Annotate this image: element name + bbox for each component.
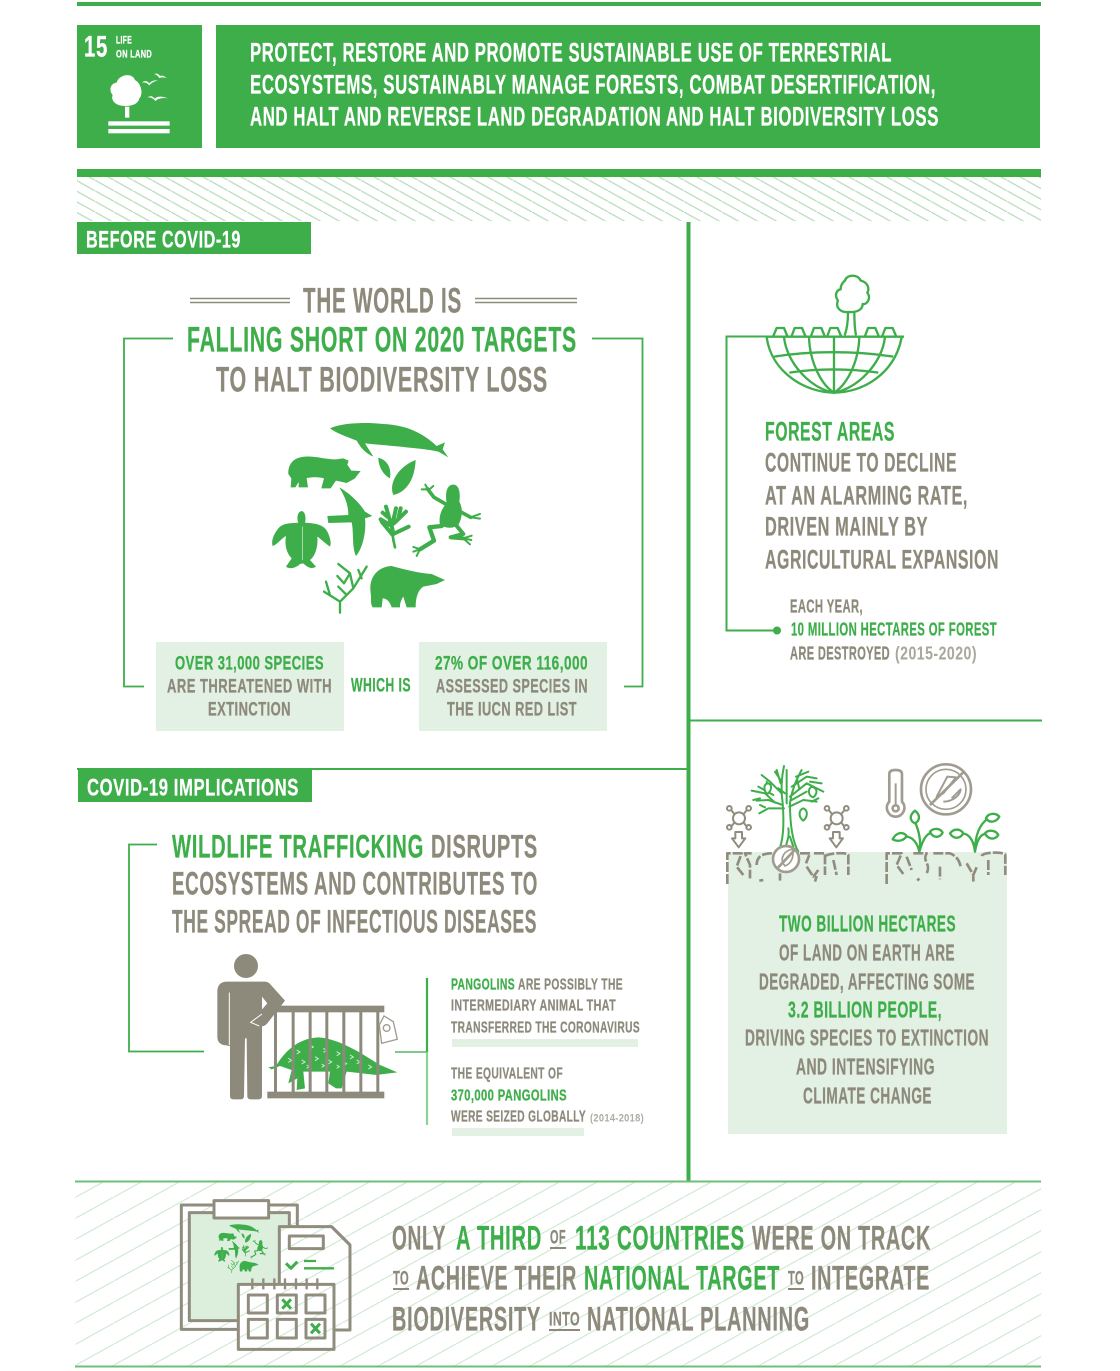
text: pangolin facts: ARE POSSIBLY THE [518, 976, 623, 993]
panel: land degradation [727, 764, 1007, 1134]
icon: seedlings [893, 811, 999, 852]
text: forest decline [765, 416, 999, 574]
text: only a third of countries: WERE ON TRACK [752, 1219, 931, 1257]
icon: thermometer [887, 770, 904, 817]
text: only a third of countries: INTEGRATE [811, 1259, 930, 1297]
heading: wildlife trafficking [172, 828, 538, 939]
icon: species on clipboard [214, 1224, 268, 1273]
text: forest decline: FOREST AREAS [765, 416, 895, 446]
label: covid-19 implications: COVID-19 IMPLICATIONS [87, 774, 299, 801]
text: pangolin facts: THE EQUIVALENT OF [451, 1065, 563, 1082]
SDG 15 badge: LIFE [116, 34, 132, 46]
callout: 27 percent: 27% OF OVER 116,000 [435, 653, 588, 674]
icon: price tag [379, 1016, 397, 1043]
icon: checklist document [279, 1227, 350, 1330]
text: only a third of countries: NATIONAL TARGET [584, 1259, 780, 1297]
text: pangolin facts: PANGOLINS [451, 976, 515, 993]
SDG 15 badge: ON LAND [116, 48, 152, 60]
heading: wildlife trafficking: WILDLIFE TRAFFICKING [172, 828, 424, 864]
icon: no sun sign [921, 764, 971, 814]
text: only a third of countries: INTO [549, 1309, 580, 1330]
icon: calendar [238, 1278, 334, 1349]
callout: 31,000 species: ARE THREATENED WITH [167, 676, 332, 697]
bracket [129, 844, 204, 1052]
text: only a third of countries: TO [393, 1268, 409, 1289]
text: pangolin facts [451, 976, 644, 1136]
text: two billion hectares: TWO BILLION HECTARES [779, 910, 956, 936]
heading: falling short on targets [187, 281, 577, 399]
icon: no leaf sign on roots [773, 846, 799, 872]
heading: wildlife trafficking: DISRUPTS [431, 828, 538, 864]
heading: wildlife trafficking: THE SPREAD OF INFECTIOUS DISEASES [172, 903, 537, 939]
icon: turtle [272, 511, 331, 568]
text: only a third of countries: OF [550, 1227, 566, 1248]
text: two billion hectares: CLIMATE CHANGE [803, 1082, 932, 1108]
label: before covid-19: BEFORE COVID-19 [86, 226, 241, 253]
icon: rhino [288, 457, 361, 488]
icon: person with caged pangolin [217, 954, 397, 1099]
callout: 27 percent: THE IUCN RED LIST [447, 699, 577, 720]
icon: clipboard [181, 1201, 297, 1329]
text: pangolin facts: TRANSFERRED THE CORONAVIRUS [451, 1019, 640, 1036]
text: only a third of countries: 113 COUNTRIES [575, 1219, 745, 1257]
icon: person [217, 954, 285, 1099]
icon: chemicals with arrows [727, 806, 849, 847]
icon: bird [327, 487, 372, 556]
text: 10 million hectares: 10 MILLION HECTARES OF FOREST [791, 619, 997, 639]
SDG 15 badge [77, 25, 202, 148]
panel: biodiversity targets [124, 281, 642, 731]
text: only a third of countries: TO [788, 1268, 804, 1289]
icon: species circle [272, 423, 480, 613]
heading: falling short on targets: TO HALT BIODIVERSITY LOSS [216, 360, 548, 399]
icon: pangolin [268, 1037, 397, 1090]
icon: degraded land [727, 764, 1005, 884]
panel dividers [77, 222, 1042, 1181]
text: two billion hectares: AND INTENSIFYING [796, 1053, 935, 1079]
text: forest decline: DRIVEN MAINLY BY [765, 511, 928, 541]
leader line [726, 336, 781, 634]
panel: wildlife trafficking [129, 828, 644, 1136]
text: 10 million hectares: ARE DESTROYED [790, 643, 890, 663]
icon: tree with fruit [752, 766, 823, 852]
panel: national planning [75, 1182, 1041, 1367]
heading: wildlife trafficking: ECOSYSTEMS AND CONTRIBUTES TO [172, 865, 538, 901]
text: two billion hectares: DEGRADED, AFFECTING SOME [759, 968, 975, 994]
text: forest decline: AT AN ALARMING RATE, [765, 480, 968, 510]
goal title banner [216, 25, 1040, 148]
text: pangolin facts: (2014-2018) [590, 1112, 644, 1124]
icon: cracked soil [727, 853, 1005, 884]
panel: forest areas [726, 276, 999, 663]
icon: coral branch [324, 564, 367, 613]
text: pangolin facts: WERE SEIZED GLOBALLY [451, 1108, 586, 1125]
text: only a third of countries [392, 1219, 931, 1338]
icon: polar bear [370, 566, 445, 607]
text: only a third of countries: A THIRD [456, 1219, 542, 1257]
label: covid-19 implications [78, 770, 312, 802]
icon: whale [330, 423, 448, 457]
text: two billion hectares [745, 910, 989, 1108]
icon: seaweed [381, 507, 409, 547]
top rule [77, 2, 1041, 6]
text: only a third of countries: BIODIVERSITY [392, 1300, 541, 1338]
callout: 31,000 species: EXTINCTION [208, 699, 291, 720]
icon: tree and birds [108, 74, 170, 133]
hatched band [77, 169, 1041, 221]
bracket [124, 338, 642, 686]
callout: 27 percent: ASSESSED SPECIES IN [436, 676, 588, 697]
text: only a third of countries: ONLY [392, 1219, 446, 1257]
callout: 27 percent [419, 642, 607, 731]
icon: cage [267, 1006, 384, 1098]
text: 10 million hectares [790, 596, 997, 663]
callout: 31,000 species: OVER 31,000 SPECIES [175, 653, 324, 674]
text: two billion hectares: 3.2 BILLION PEOPLE, [788, 996, 942, 1022]
icon: clipboard, document and calendar [181, 1201, 350, 1349]
SDG 15 badge: 15 [84, 30, 108, 63]
text: 10 million hectares: (2015-2020) [895, 643, 977, 663]
text: pangolin facts: 370,000 PANGOLINS [451, 1087, 567, 1104]
icon: frog [413, 485, 480, 556]
text: only a third of countries: ACHIEVE THEIR [416, 1259, 577, 1297]
heading: falling short on targets: THE WORLD IS [303, 281, 462, 320]
icon: globe with tree [766, 276, 904, 393]
connector to pangolin facts [395, 978, 427, 1125]
text: two billion hectares: OF LAND ON EARTH ARE [779, 939, 955, 965]
heading: falling short on targets: FALLING SHORT ON 2020 TARGETS [187, 320, 577, 359]
text: forest decline: CONTINUE TO DECLINE [765, 447, 957, 477]
text: only a third of countries: NATIONAL PLANNING [587, 1300, 810, 1338]
callout: 31,000 species [156, 642, 344, 731]
text: which is: WHICH IS [351, 675, 411, 696]
text: pangolin facts: INTERMEDIARY ANIMAL THAT [451, 997, 616, 1014]
text: 10 million hectares: EACH YEAR, [790, 596, 863, 616]
icon: leaves [378, 458, 416, 495]
